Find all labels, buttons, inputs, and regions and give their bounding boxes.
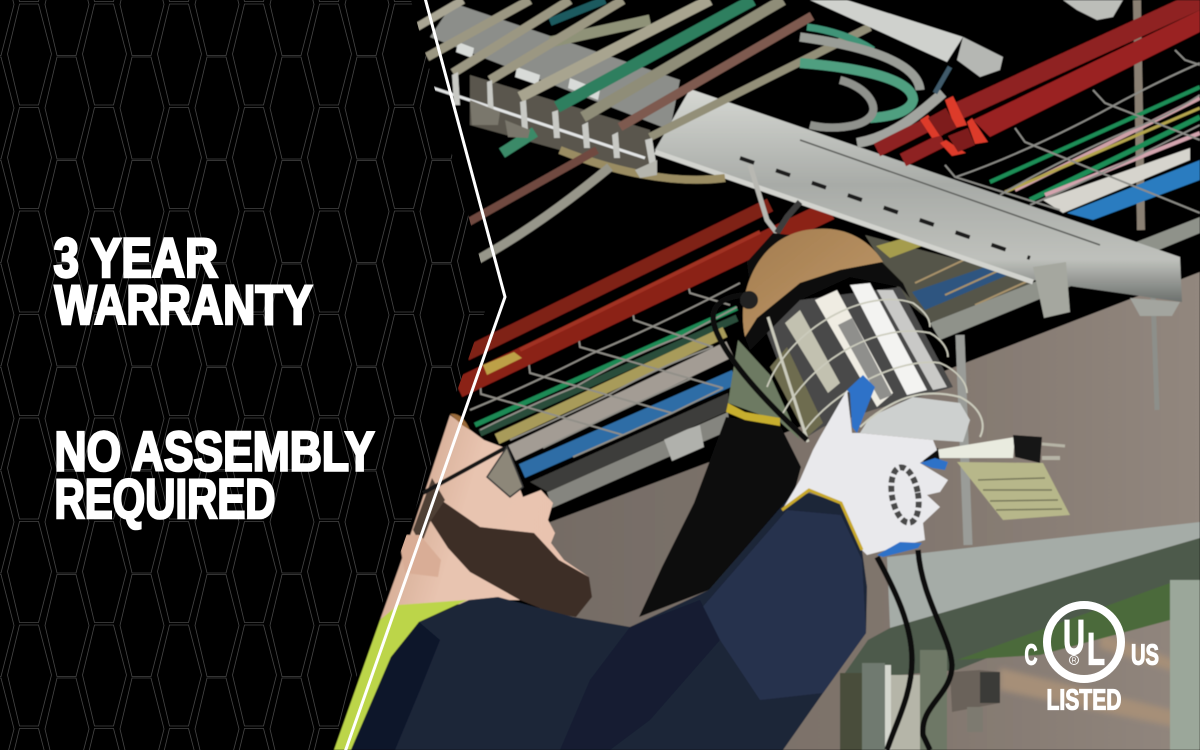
white chevron divider	[345, 0, 505, 750]
work glove	[782, 375, 948, 557]
work light	[713, 229, 983, 442]
LED cylinder	[767, 287, 953, 437]
tan dome	[743, 229, 883, 337]
vertical threaded rods	[960, 0, 1157, 545]
panel: black hexagon background	[0, 0, 490, 750]
icon: UL listed mark: U	[1063, 611, 1085, 665]
power cords	[877, 550, 952, 750]
lower strut channel	[930, 217, 1200, 340]
heading: no assembly required: REQUIRED	[54, 468, 276, 530]
face and beard	[380, 414, 592, 620]
LED disc	[860, 397, 970, 442]
icon: UL listed mark: R	[1072, 658, 1077, 664]
red pipes upper	[877, 0, 1200, 160]
metal table frame	[840, 522, 1200, 750]
lamp cable	[713, 295, 807, 440]
icon: UL listed mark: US	[1131, 640, 1159, 672]
icon: UL listed mark: L	[1087, 624, 1105, 674]
icon: UL listed mark: C	[1024, 640, 1038, 672]
bracket row	[433, 72, 657, 178]
heading: no assembly required: NO ASSEMBLY	[54, 420, 374, 482]
glasses	[423, 447, 523, 497]
silver pipe top	[810, 0, 1123, 77]
back flex conduit	[550, 0, 725, 180]
photo: worker hanging a work light under ceiling conduit	[330, 0, 1200, 750]
wall	[540, 272, 1200, 750]
wire mesh	[470, 283, 740, 457]
curved flex conduits	[800, 27, 950, 143]
navy sleeve	[351, 493, 867, 750]
main strut channel	[655, 89, 1182, 318]
ribbed conduits	[417, 0, 870, 260]
worker's raised arm, black	[639, 417, 801, 617]
yellow sticker on pipe	[483, 352, 522, 375]
snap hook	[747, 165, 800, 285]
heading: no assembly required	[54, 420, 374, 530]
lower conduit and coupling	[547, 412, 730, 508]
black ring	[745, 262, 910, 350]
back silver trapeze band	[430, 3, 680, 130]
hi-vis cuff	[726, 340, 800, 440]
wire cage	[767, 299, 983, 442]
tag and plug	[920, 435, 1070, 520]
bracket band	[470, 75, 657, 178]
heading: 3 year warranty: 3 YEAR	[54, 227, 218, 289]
upper right cable tray	[945, 50, 1200, 220]
heading: 3 year warranty: WARRANTY	[54, 274, 312, 336]
icon: UL listed mark	[1024, 605, 1159, 716]
icon: UL listed mark: LISTED	[1046, 684, 1122, 716]
hi-vis vest	[334, 600, 467, 750]
heading: 3 year warranty	[54, 227, 312, 336]
middle tray behind lamp	[865, 235, 1035, 325]
lower left cable tray	[470, 283, 740, 492]
red pipes lower	[458, 205, 830, 388]
